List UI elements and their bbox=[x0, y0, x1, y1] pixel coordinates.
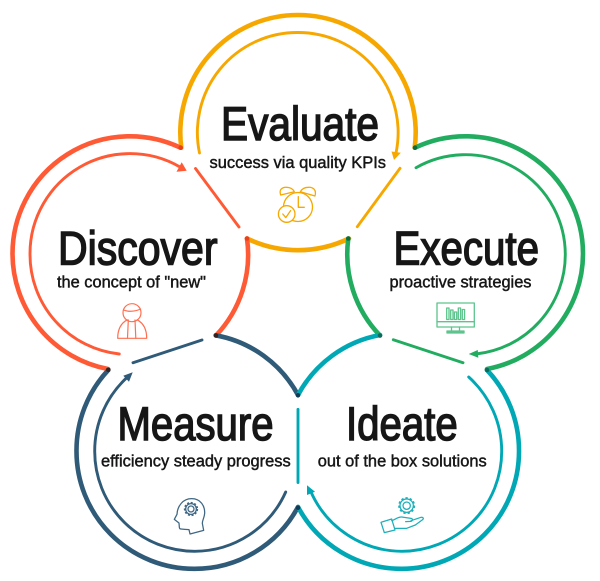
ideate outer ring bbox=[298, 335, 519, 569]
panel: execute bbox=[347, 136, 583, 369]
execute outer ring bbox=[347, 136, 583, 369]
measure inner arrow arc bbox=[95, 372, 286, 551]
icon: hand holding gear bbox=[381, 498, 423, 533]
ideate subtitle: out of the box solutions bbox=[318, 453, 487, 471]
execute connector line bbox=[393, 340, 463, 363]
measure connector line bbox=[133, 340, 202, 363]
panel: evaluate bbox=[180, 15, 416, 250]
discover outer ring bbox=[12, 136, 248, 369]
ideate heading: Ideate bbox=[346, 397, 458, 450]
evaluate subtitle: success via quality KPIs bbox=[210, 154, 386, 172]
measure heading: Measure bbox=[118, 397, 274, 450]
icon: alarm clock bbox=[278, 187, 315, 222]
evaluate heading: Evaluate bbox=[221, 97, 379, 150]
execute inner arrow arc bbox=[416, 155, 565, 358]
panel: discover bbox=[12, 136, 248, 369]
evaluate outer ring bbox=[180, 15, 416, 250]
discover subtitle: the concept of "new" bbox=[57, 273, 206, 291]
ideate inner arrow arc bbox=[307, 377, 502, 551]
discover connector line bbox=[196, 168, 239, 227]
discover inner arrow arc bbox=[30, 154, 187, 354]
measure subtitle: efficiency steady progress bbox=[101, 453, 291, 471]
evaluate inner arrow arc bbox=[197, 32, 401, 160]
icon: head with gear bbox=[174, 499, 205, 534]
measure outer ring bbox=[76, 335, 298, 569]
execute subtitle: proactive strategies bbox=[390, 273, 532, 291]
panel: measure bbox=[76, 335, 298, 569]
icon: person with tie bbox=[118, 304, 147, 338]
discover heading: Discover bbox=[58, 221, 218, 274]
panel: ideate bbox=[298, 335, 519, 569]
evaluate connector line bbox=[357, 168, 400, 227]
ideate connector line bbox=[297, 409, 299, 482]
icon: monitor with bars bbox=[437, 303, 474, 333]
execute heading: Execute bbox=[394, 221, 539, 274]
junction dots bbox=[106, 145, 489, 510]
